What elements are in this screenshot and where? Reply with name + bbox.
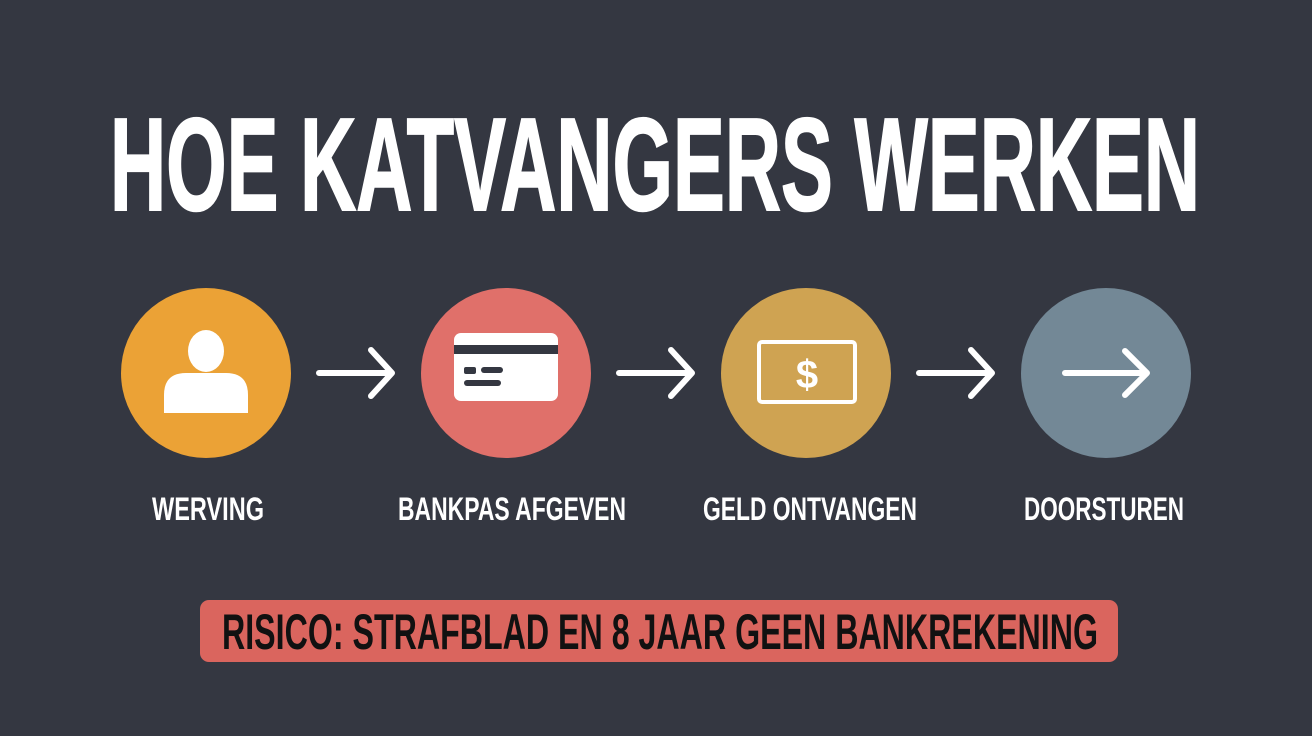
icon: money circle: $ [796,353,818,397]
step 3: geld ontvangen [703,288,917,527]
label: werving: WERVING [152,491,264,527]
step 4: doorsturen [1021,288,1191,527]
icon: person circle [121,288,291,458]
icon: bank card circle [421,288,591,458]
label: bankpas afgeven: BANKPAS AFGEVEN [398,491,626,527]
step 2: bankpas afgeven [398,288,626,527]
arrow 3 [919,350,992,396]
icon: forward circle [1021,288,1191,458]
icon: money circle [721,288,891,458]
arrow 1 [319,350,392,396]
label: geld ontvangen: GELD ONTVANGEN [703,491,917,527]
label: doorsturen: DOORSTUREN [1024,491,1184,527]
step 1: werving [121,288,291,527]
arrow 2 [619,350,692,396]
